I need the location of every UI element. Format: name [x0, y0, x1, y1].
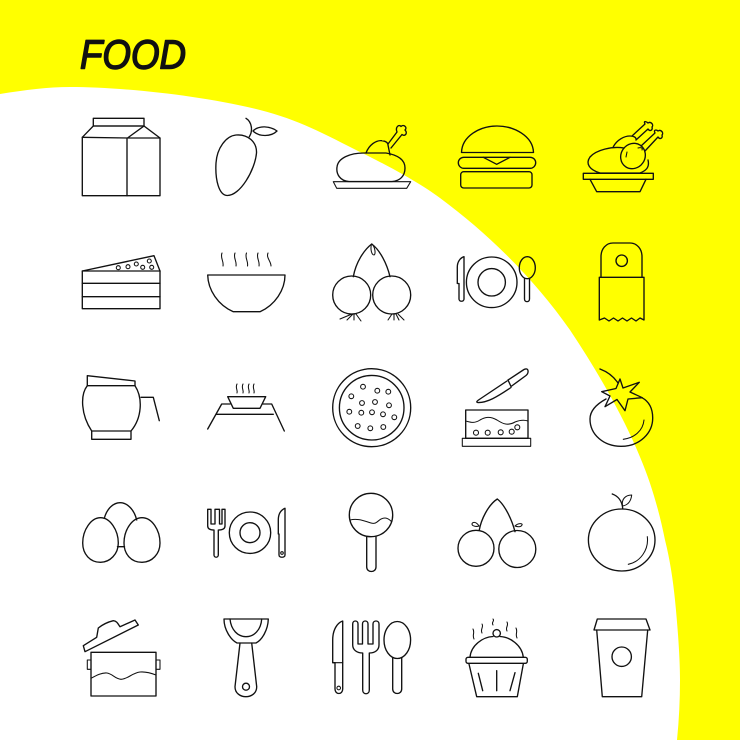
- icon: coffee pot: [83, 376, 159, 439]
- icon: plate with knife and spoon: [457, 257, 535, 308]
- icon: knife over cake: [462, 369, 531, 446]
- icon: fork, plate and knife: [208, 508, 285, 557]
- icon: steaming cloche dish: [466, 619, 527, 697]
- icon: pizza: [333, 369, 411, 447]
- icon: layered cake slice: [82, 256, 160, 309]
- icon: orange with leaf: [588, 494, 655, 571]
- icon: tomato: [590, 369, 653, 446]
- icon: bowl on table: [208, 384, 284, 431]
- icon: chicken with two drumsticks in bowl: [583, 122, 663, 192]
- icon: napkin: [599, 243, 644, 321]
- icon: knife, fork and spoon: [333, 621, 411, 694]
- icon: radishes: [333, 244, 411, 321]
- icon: roast chicken on plate: [333, 126, 411, 188]
- icon: peeler: [224, 619, 268, 697]
- icon grid: [82, 118, 663, 697]
- icon: mango: [216, 118, 277, 196]
- icon: three eggs: [83, 503, 160, 562]
- icon: burger: [458, 126, 536, 188]
- icon: cherries: [458, 499, 536, 568]
- icon: milk carton: [82, 118, 160, 196]
- icon: pot with lifted lid: [83, 620, 160, 696]
- title: FOOD: [80, 32, 186, 78]
- icon: steaming bowl: [208, 253, 285, 312]
- icon: takeaway coffee cup: [594, 619, 650, 697]
- icon: round lollipop: [349, 493, 393, 572]
